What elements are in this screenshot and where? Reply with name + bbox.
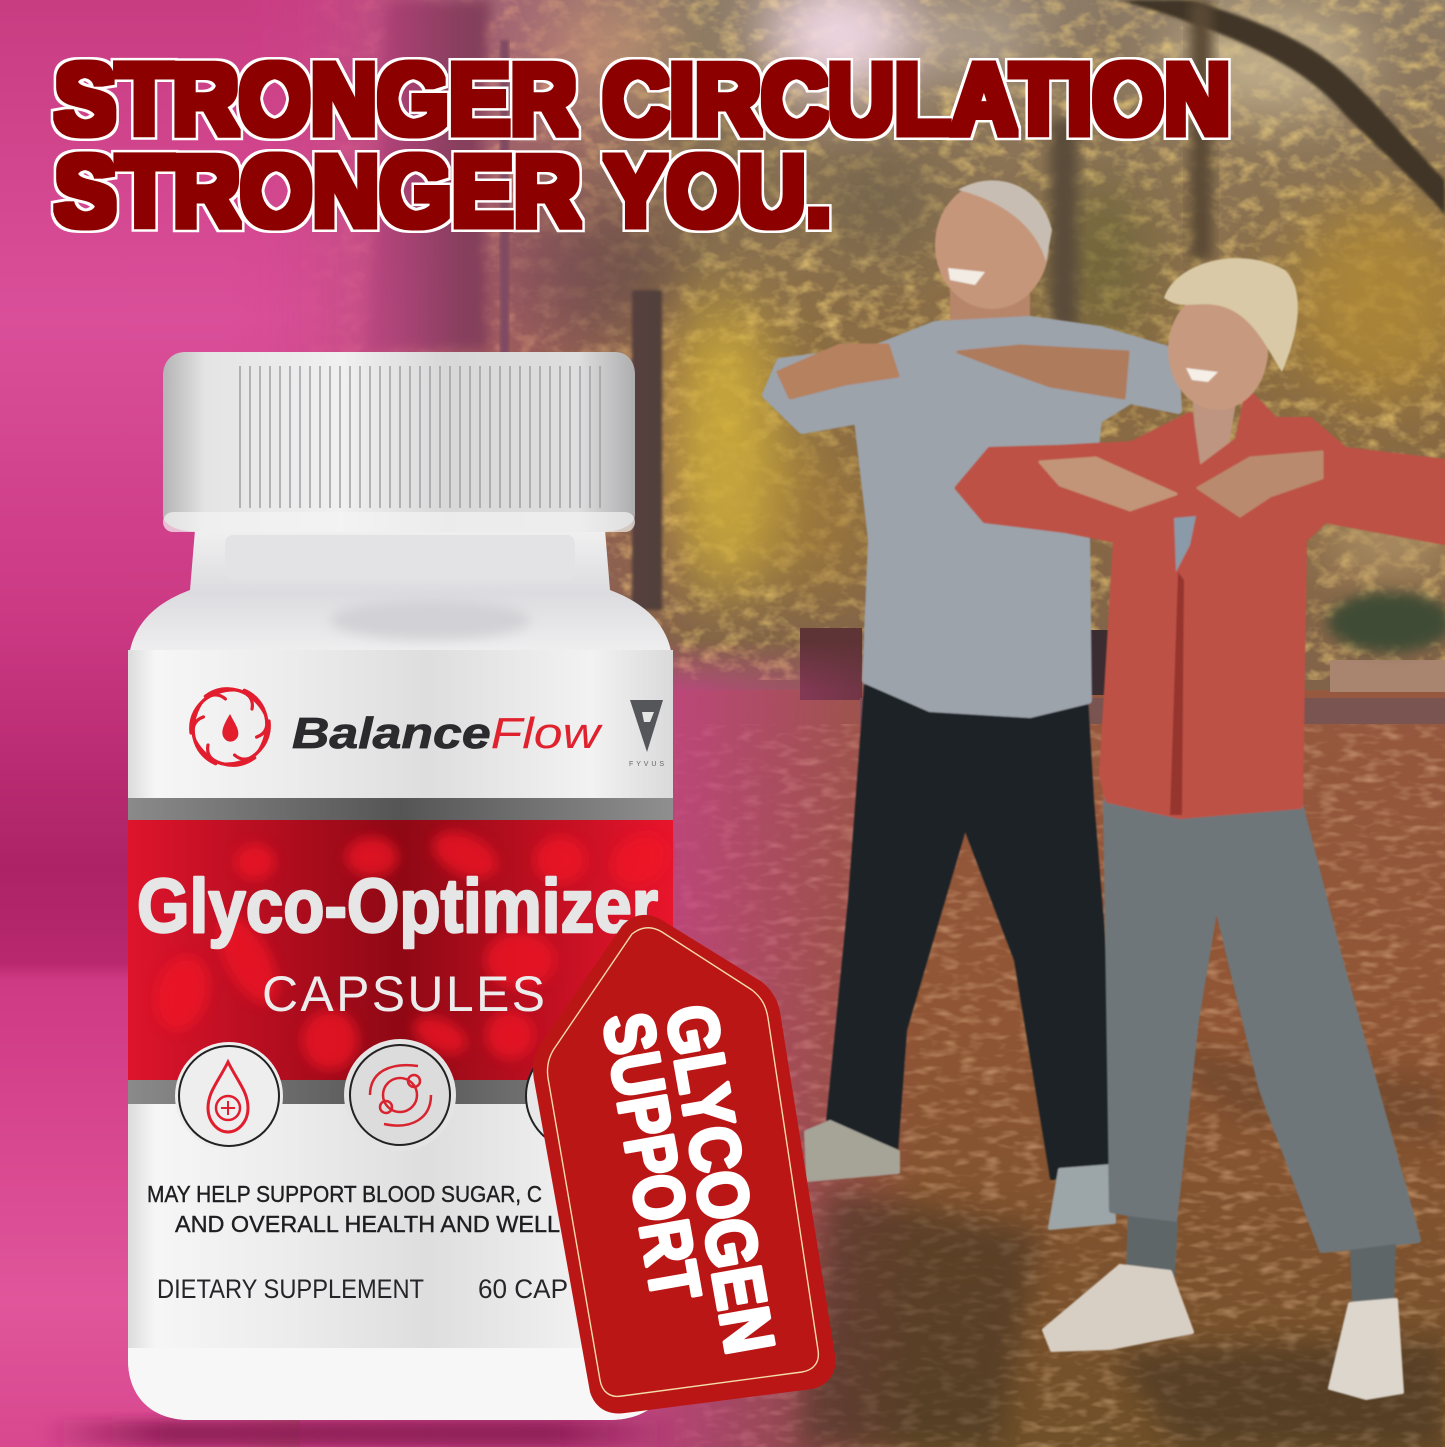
man: sweatshirt [766, 320, 1178, 714]
woman: hands [1040, 458, 1176, 510]
bottle: blood cells [147, 823, 678, 1070]
man: head [935, 181, 1049, 309]
woman: trousers [1106, 800, 1418, 1250]
brand logo [178, 674, 282, 780]
bottle: neck and shoulder [128, 530, 673, 670]
icon: circulation [344, 1039, 456, 1151]
tag: glycogen support [533, 915, 835, 1413]
man: trousers [828, 686, 1122, 1178]
tag text: GLYCOGEN [651, 999, 789, 1359]
supplement bottle [128, 352, 678, 1420]
woman: head [1168, 290, 1268, 410]
woman: neck [1192, 380, 1240, 480]
background foliage and sky patches [500, 0, 1445, 600]
claim text: MAY HELP SUPPORT BLOOD SUGAR, C [147, 1181, 542, 1207]
capsule count: 60 CAP [478, 1274, 568, 1304]
man exercising [766, 180, 1178, 1228]
dietary supplement note: DIETARY SUPPLEMENT [157, 1274, 424, 1304]
icon: third badge [526, 1042, 634, 1150]
bottle: red label band [128, 820, 673, 1082]
claim text: AND OVERALL HEALTH AND WELL [175, 1211, 560, 1237]
man: left shoe [806, 1122, 898, 1180]
bottle: cap [163, 352, 635, 532]
title [54, 44, 1230, 248]
ground shadows [800, 1040, 1445, 1447]
woman: jacket [958, 392, 1445, 816]
park bench and bin [800, 592, 1445, 724]
title: STRONGER YOU. [54, 136, 832, 248]
product form: CAPSULES [262, 966, 545, 1022]
woman: inner top [1174, 516, 1196, 572]
bottle: body [128, 650, 673, 1420]
woman: cuffs [1126, 1216, 1178, 1290]
tag text [588, 999, 789, 1359]
woman: shoes [1044, 1266, 1192, 1350]
woman exercising [958, 258, 1445, 1398]
claim text [147, 1181, 560, 1237]
brand name: Balance Flow [292, 709, 604, 758]
icon: blood drop [175, 1042, 283, 1150]
bottle: grey band top [128, 798, 673, 820]
man: right shoe [1050, 1166, 1114, 1228]
man: neck [950, 280, 1030, 332]
icon: manufacturer mark [629, 700, 664, 768]
product name: Glyco-Optimizer [137, 864, 658, 949]
tag shape [533, 915, 835, 1413]
tree trunks and branches [365, 0, 1445, 610]
tag text: SUPPORT [588, 1007, 715, 1306]
icon: manufacturer mark: FYVUS [629, 761, 664, 768]
man: forearms and hands [778, 345, 898, 398]
tag stitching [547, 928, 818, 1396]
bottle: grey band bottom [128, 1080, 673, 1104]
title: STRONGER CIRCULATION [54, 44, 1230, 156]
